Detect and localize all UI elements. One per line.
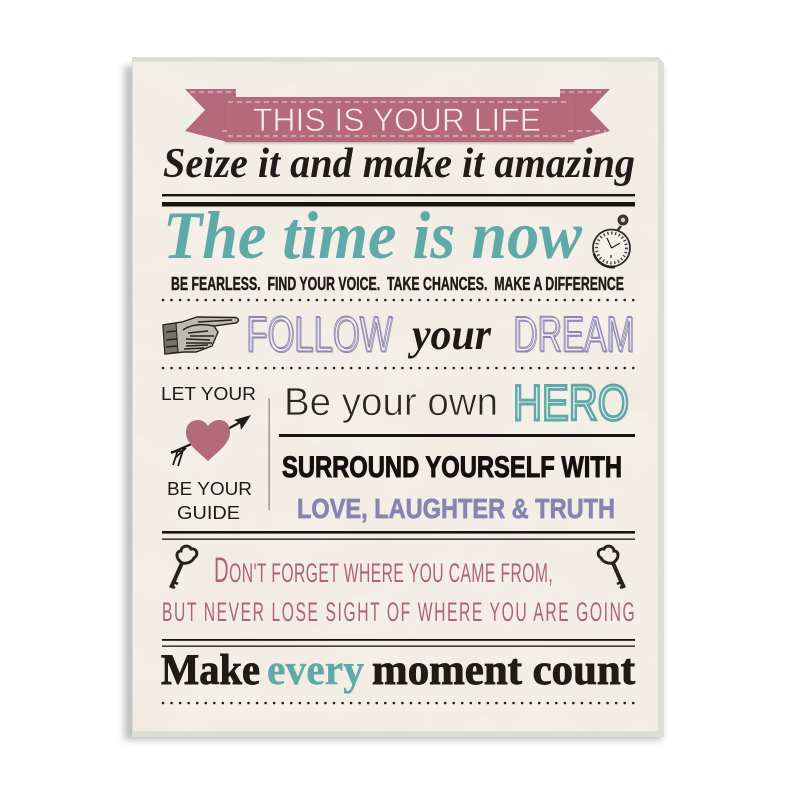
text: be your guide xyxy=(167,479,252,523)
text: don't forget: DON'T FORGET WHERE YOU CAME FROM, xyxy=(214,551,553,591)
icon: pointing hand xyxy=(163,317,238,354)
text: let your: LET YOUR xyxy=(161,384,256,404)
text: follow your dream: DREAM xyxy=(513,306,634,362)
headline: the time is now: The time is now xyxy=(163,197,583,273)
double rule xyxy=(162,531,635,540)
banner: this is your life: THIS IS YOUR LIFE xyxy=(253,102,541,138)
double rule xyxy=(162,639,635,647)
double rule xyxy=(162,194,635,206)
banner: this is your life xyxy=(185,89,610,142)
text: make every moment count: moment count xyxy=(372,647,636,694)
dotted rule xyxy=(163,299,637,301)
text: make every moment count xyxy=(161,647,636,694)
text: surround yourself with: SURROUND YOURSELF WITH xyxy=(282,451,622,484)
text: follow your dream: your xyxy=(407,310,492,359)
dotted rule xyxy=(163,702,637,704)
text: be your own hero: HERO xyxy=(513,375,629,431)
text: love laughter truth: LOVE, LAUGHTER & TRUTH xyxy=(297,493,615,524)
canvas: wall plaque xyxy=(124,57,664,740)
text: be your own hero xyxy=(284,375,629,431)
dotted rule xyxy=(163,367,637,369)
icon: key right xyxy=(598,546,625,588)
text: follow your dream xyxy=(246,306,634,362)
icon: pocket watch xyxy=(593,214,630,267)
subtitle: seize it: Seize it and make it amazing xyxy=(163,141,635,187)
text: be your own hero: Be your own xyxy=(284,381,498,424)
text: be your guide: GUIDE xyxy=(177,503,240,523)
text: be your guide: BE YOUR xyxy=(167,479,252,499)
icon: key left xyxy=(170,546,197,588)
rule xyxy=(279,434,635,437)
icon: heart with arrow xyxy=(171,415,251,466)
vertical divider xyxy=(268,398,270,510)
text: make every moment count: every xyxy=(267,647,364,694)
text: but never lose sight: BUT NEVER LOSE SIGHT OF WHERE YOU ARE GOING xyxy=(162,597,635,627)
text: make every moment count: Make xyxy=(161,647,260,694)
text: follow your dream: FOLLOW xyxy=(246,306,393,362)
